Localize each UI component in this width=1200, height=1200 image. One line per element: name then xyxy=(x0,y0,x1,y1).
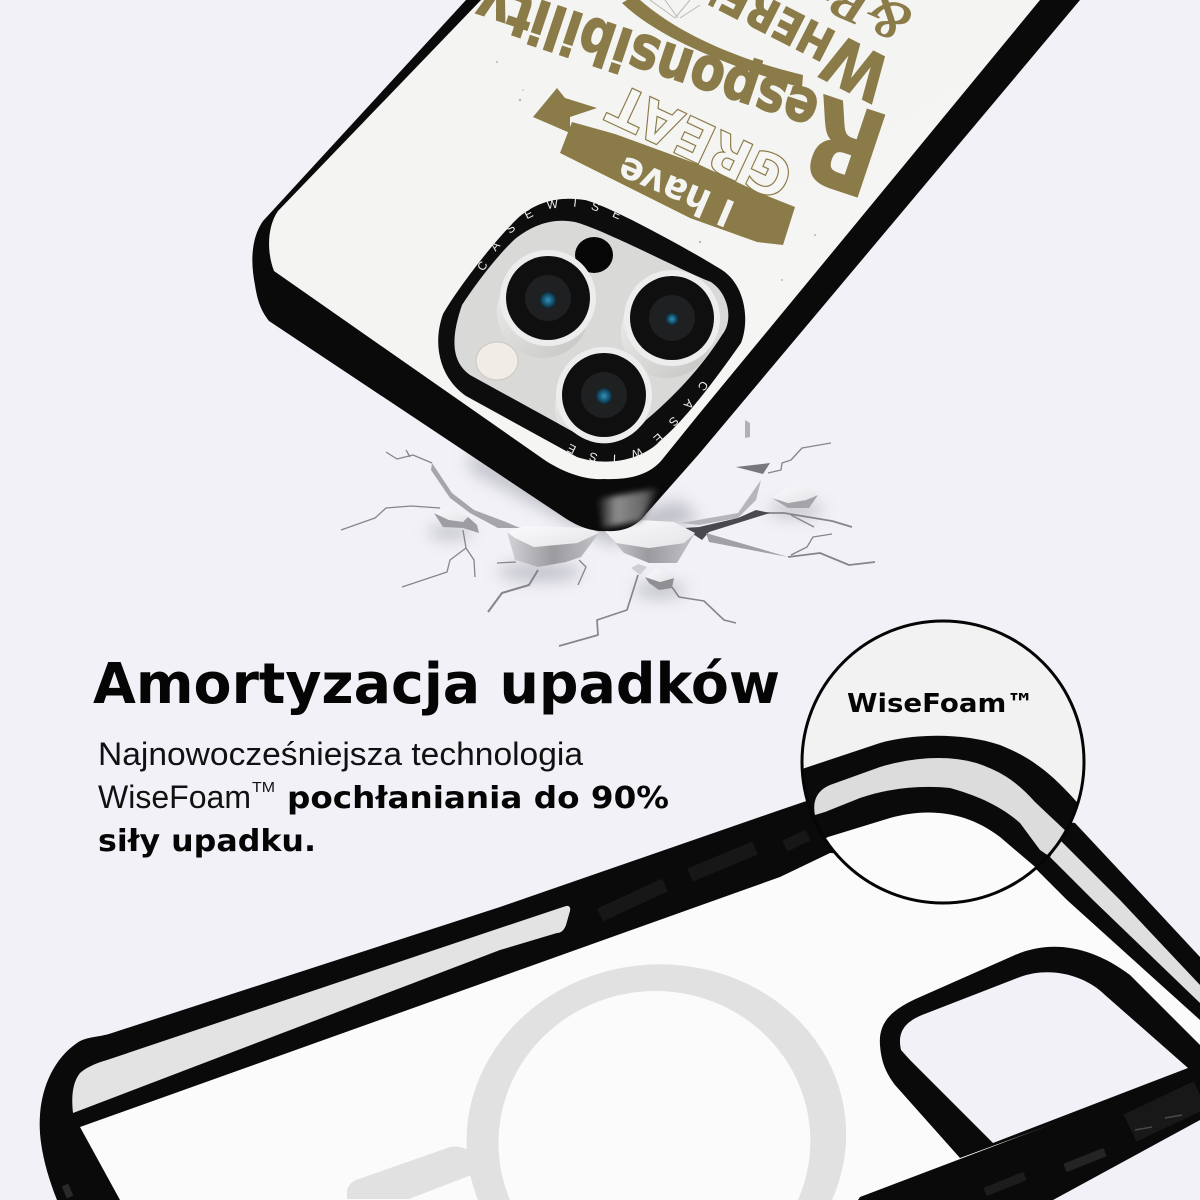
callout: WiseFoam magnifier xyxy=(802,621,1084,903)
right slab wall xyxy=(681,480,761,525)
case body black xyxy=(252,0,1080,531)
bottom edge details xyxy=(65,1095,1200,1197)
magsafe ring xyxy=(467,964,846,1200)
left slab wall xyxy=(431,463,520,528)
body text: Najnowocześniejsza technologia xyxy=(98,736,583,772)
body text xyxy=(98,736,669,859)
camera plate xyxy=(438,198,746,462)
magnifier label: WiseFoam™ xyxy=(847,689,1034,719)
artwork specks xyxy=(496,61,816,281)
body text: pochłaniania do 90% xyxy=(287,781,669,816)
clear back panel xyxy=(80,853,1200,1200)
artwork: Great Responsibility xyxy=(450,0,920,281)
foam channel right xyxy=(1050,840,1200,1003)
fragment right centre xyxy=(602,520,695,563)
body text: TM xyxy=(252,779,275,796)
artwork flag xyxy=(533,88,597,133)
lens two xyxy=(624,270,720,366)
artwork text GREAT: GREAT xyxy=(599,70,803,211)
fragments small bottom xyxy=(631,564,674,590)
illustration: case interior from back xyxy=(40,793,1200,1200)
foam channel left xyxy=(72,906,570,1113)
soft shadows xyxy=(428,450,824,598)
illustration: cracked ground xyxy=(341,420,875,646)
fragment small left xyxy=(434,507,479,533)
lens barrels xyxy=(497,296,710,444)
body text: siły upadku. xyxy=(98,824,316,859)
lens three xyxy=(556,347,652,443)
heading: Amortyzacja upadków xyxy=(93,652,780,717)
phone back surface xyxy=(269,0,1040,479)
artwork main ribbon xyxy=(560,122,795,245)
magnified case edge xyxy=(802,736,1084,903)
dark crack gap xyxy=(684,510,770,540)
magnifier disc xyxy=(802,621,1084,903)
camera inner plate xyxy=(454,221,728,443)
magnifier ring xyxy=(802,621,1084,903)
side buttons xyxy=(600,835,808,915)
bumper brand bottom: CASEWISE xyxy=(566,382,708,462)
camera cutout hole xyxy=(900,972,1188,1143)
body text: WiseFoam xyxy=(98,779,251,815)
bumper brand top: CASEWISE xyxy=(478,199,620,270)
rock fragment right xyxy=(772,485,818,508)
artwork ribbon upper xyxy=(622,0,803,88)
fragment left centre xyxy=(507,526,599,567)
dark triangle xyxy=(736,463,770,474)
case frame black xyxy=(40,793,1200,1200)
upright shard xyxy=(745,420,750,438)
camera bumper black xyxy=(438,199,745,462)
camera cutout frame xyxy=(880,947,1200,1158)
artwork web sketch xyxy=(650,0,700,18)
camera flash xyxy=(476,342,518,380)
lens one xyxy=(500,250,596,346)
camera microphone hole xyxy=(575,237,613,273)
crack lines xyxy=(341,443,875,646)
corner gloss xyxy=(598,488,659,528)
magsafe pill xyxy=(347,1147,480,1199)
wedge crack xyxy=(706,533,788,557)
illustration: top phone with case xyxy=(252,0,1080,532)
artwork text I have: I have xyxy=(611,147,741,235)
